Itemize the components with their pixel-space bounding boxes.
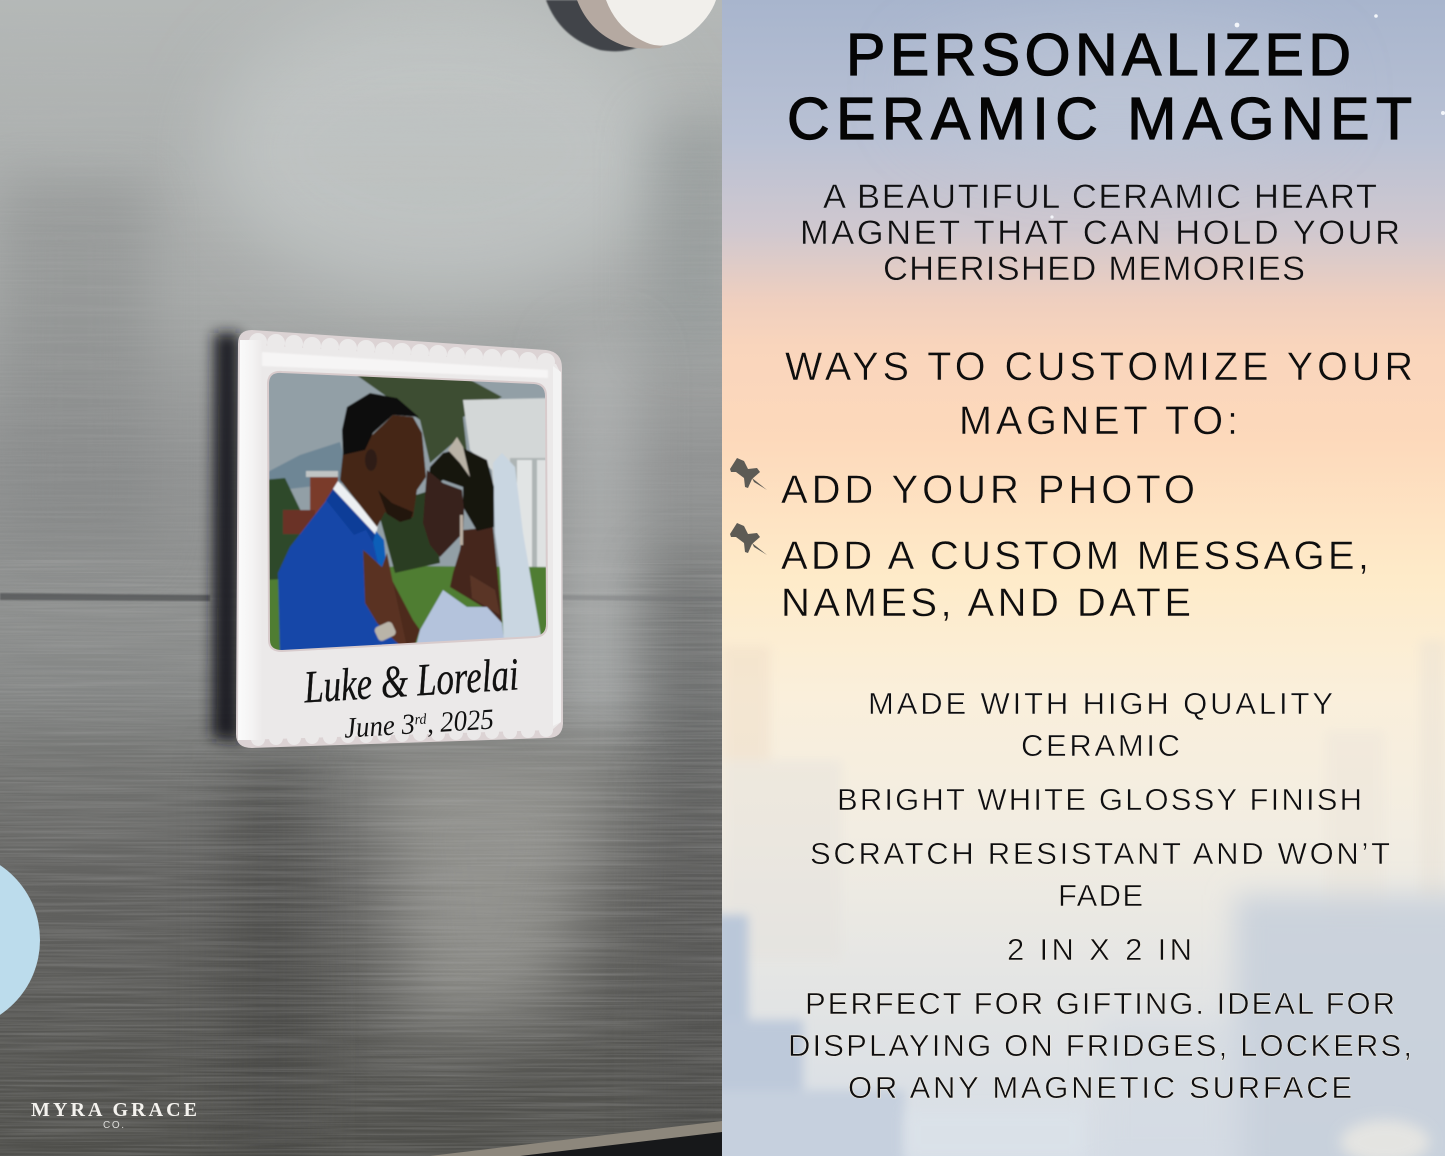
- feature: uses: DISPLAYING ON FRIDGES, LOCKERS,: [788, 1028, 1412, 1063]
- customization: add your photo: ADD YOUR PHOTO: [781, 468, 1195, 512]
- groom head: [340, 415, 426, 527]
- feature list: [788, 686, 1412, 1105]
- subtitle: [802, 184, 1398, 280]
- text: date: rd: [414, 712, 427, 728]
- bride dress: [416, 589, 504, 642]
- customization: custom message: NAMES, AND DATE: [781, 581, 1191, 625]
- ceramic magnet with photo: [212, 330, 563, 748]
- heading: ways to customize: MAGNET TO:: [959, 399, 1238, 443]
- subtitle: CHERISHED MEMORIES: [883, 250, 1305, 288]
- bride hair: [427, 448, 494, 531]
- icon: round white magnet, top: [546, 0, 716, 51]
- subtitle: MAGNET THAT CAN HOLD YOUR: [800, 214, 1400, 252]
- text: date: , 2025: [426, 704, 495, 740]
- groom suit: [276, 496, 400, 650]
- text: names: Luke & Lorelai: [302, 648, 520, 712]
- subtitle: A BEAUTIFUL CERAMIC HEART: [823, 178, 1377, 216]
- white building: [462, 398, 546, 484]
- feature: size: 2 IN X 2 IN: [1007, 932, 1192, 967]
- panel: photo of magnet on steel fridge: [0, 0, 740, 1156]
- veil: [493, 453, 541, 646]
- photo: bride and groom: [269, 372, 546, 650]
- icon: round blue magnet, left edge: [0, 865, 40, 1015]
- brand logo: [31, 1103, 196, 1128]
- icon: push pin: [730, 523, 767, 555]
- feature: durability: FADE: [1058, 878, 1143, 913]
- title: [789, 32, 1412, 140]
- grass: [270, 564, 546, 650]
- title: PERSONALIZED: [846, 22, 1351, 88]
- decorative star specks: [1016, 14, 1445, 219]
- feature: material: CERAMIC: [1021, 728, 1180, 763]
- panel: product details on watercolor background: [715, 0, 1445, 1156]
- customization: custom message: ADD A CUSTOM MESSAGE,: [781, 534, 1369, 578]
- feature: uses: OR ANY MAGNETIC SURFACE: [848, 1070, 1352, 1105]
- icon: push pin: [730, 458, 767, 490]
- sky and mountain: [269, 372, 545, 568]
- magnet body: [236, 330, 563, 748]
- feature: uses: PERFECT FOR GIFTING. IDEAL FOR: [805, 986, 1395, 1021]
- heading: ways to customize: WAYS TO CUSTOMIZE YOUR: [785, 345, 1413, 389]
- tree: [352, 372, 502, 463]
- feature: durability: [810, 836, 1390, 913]
- feature: material: MADE WITH HIGH QUALITY: [868, 686, 1333, 721]
- bride neck and shoulder: [450, 527, 502, 623]
- brand logo: CO.: [103, 1120, 124, 1131]
- feature: durability: SCRATCH RESISTANT AND WON’T: [810, 836, 1390, 871]
- arms, hands and watch: [392, 580, 420, 650]
- feature: material: [870, 692, 1332, 756]
- brand logo: MYRA GRACE: [31, 1099, 197, 1121]
- feature: uses: [788, 986, 1412, 1105]
- title: CERAMIC MAGNET: [787, 86, 1412, 152]
- hedges and brick: [269, 478, 301, 580]
- text: date: June 3: [343, 708, 421, 745]
- heading: ways to customize: [785, 352, 1412, 434]
- feature: finish: BRIGHT WHITE GLOSSY FINISH: [837, 782, 1362, 817]
- customization: custom message: [781, 541, 1366, 621]
